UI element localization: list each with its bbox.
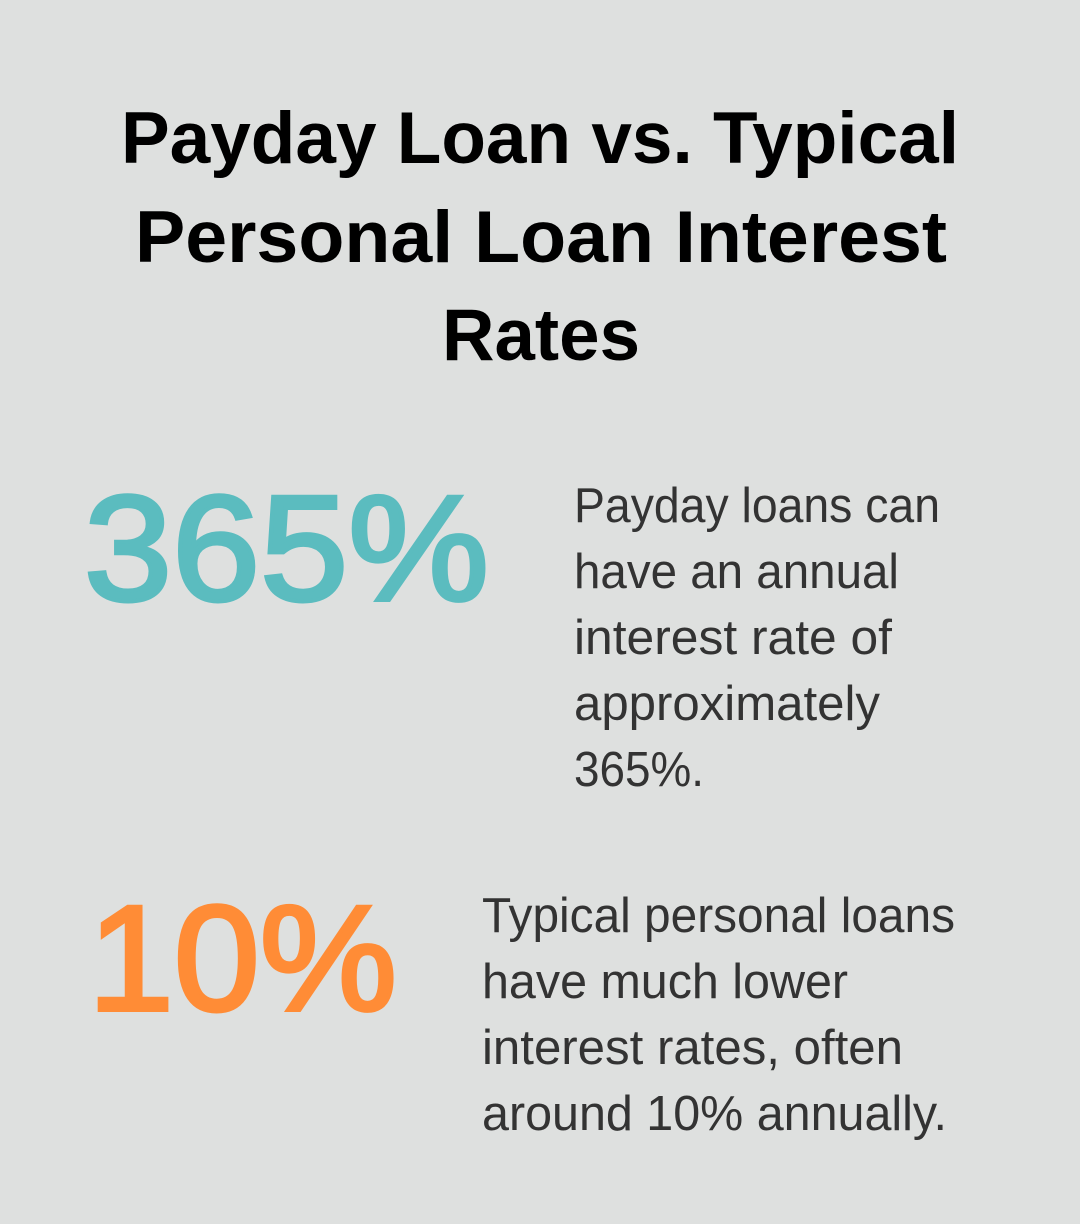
description: payday loans: interest rate of xyxy=(574,611,892,665)
description: payday loans: Payday loans can xyxy=(574,479,940,533)
description: payday loans xyxy=(574,479,940,797)
statistic: 365%: 365% xyxy=(84,464,489,632)
title: Payday Loan vs. Typical xyxy=(121,98,959,179)
description: payday loans: approximately xyxy=(574,677,881,731)
description: payday loans: 365%. xyxy=(574,743,704,797)
description: personal loans xyxy=(482,889,955,1141)
title: Rates xyxy=(442,295,640,376)
title xyxy=(121,98,959,376)
statistic: 10%: 10% xyxy=(88,874,397,1042)
description: payday loans: have an annual xyxy=(574,545,899,599)
description: personal loans: have much lower xyxy=(482,955,848,1009)
title: Personal Loan Interest xyxy=(135,197,947,278)
description: personal loans: around 10% annually. xyxy=(482,1087,947,1141)
description: personal loans: interest rates, often xyxy=(482,1021,903,1075)
description: personal loans: Typical personal loans xyxy=(482,889,955,943)
